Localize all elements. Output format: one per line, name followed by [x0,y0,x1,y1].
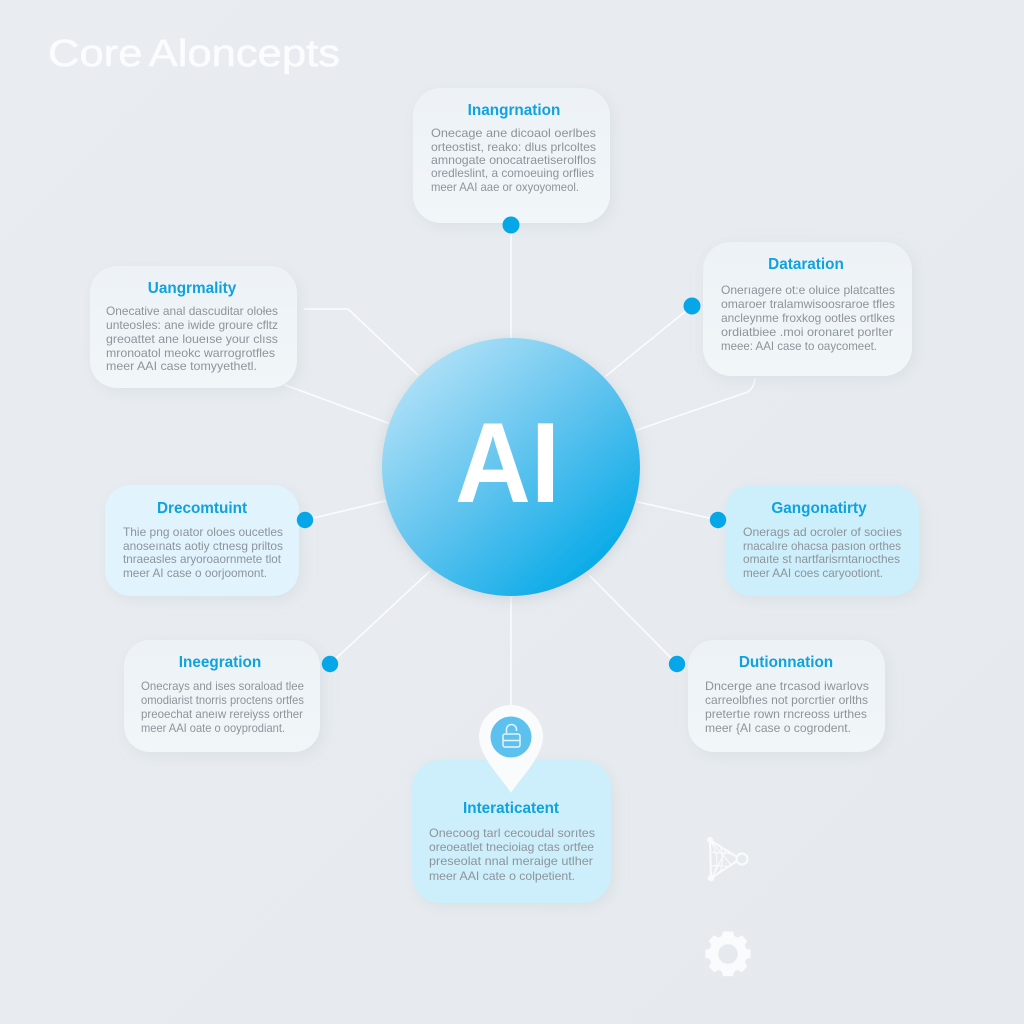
body text: pretertıe rown rncreoss urthes [705,708,867,721]
pin inner circle [490,716,532,758]
body text: Onecage ane dicoaol oerlbes [431,127,596,140]
body text: meer AAI cate o colpetient. [429,870,575,883]
panel: Inangrnation [413,88,610,223]
body text: anoseınats aotiy ctnesg priltos [123,540,283,553]
body text: Onecrays and ises soraload tlee [141,680,304,693]
body text [123,526,283,580]
body text: mronoatol meokc warrogrotfles [106,347,275,360]
node dot: middle left [297,512,313,528]
body text: Onecative anal dascuditar olołes [106,305,278,318]
body text: meer AAI aae or oxyoyomeol. [431,181,579,194]
central AI circle [382,338,640,596]
icon: location pin with lock [479,705,543,793]
body text: carreolbfıes not porcrtier orlths [705,694,868,707]
lock glyph [503,725,520,747]
panel background [703,242,912,376]
panel background [688,640,885,752]
panel: Ineegration [124,640,320,752]
body text [429,827,595,883]
heading: Inangrnation [468,102,560,119]
body text: meer AI case o oorjoomont. [123,567,267,580]
body text: preoechat aneıw rereiyss orther [141,708,303,721]
body text [141,680,304,735]
node dot: top [502,216,520,234]
body text: meer {AI case o cogrodent. [705,722,851,735]
body text [743,526,902,580]
panel background [412,760,611,903]
body text: orteostist, reako: dlus prlcoltes [431,141,596,154]
pin shape [479,705,543,793]
panel background [90,266,297,388]
body text [431,127,596,194]
icon: gear [705,931,751,976]
panel background [725,485,919,596]
body text: Dncerge ane trcasod iwarlovs [705,680,869,693]
title: Core Aloncepts [48,33,340,75]
body text: ancleynme froxkog ootles ortlkes [721,312,895,325]
panel: Dutionnation [688,640,885,752]
body text: Thie png oıator oloes oucetles [123,526,283,539]
node dot: upper right [684,298,700,314]
body text: meer AAI coes caryootiont. [743,567,883,580]
body text: amnogate onocatraetiserolflos [431,154,596,167]
heading: Drecomtuint [157,500,247,517]
body text [106,305,278,373]
node dot: middle right [710,512,726,528]
body text: Onerags ad ocroler of sociıes [743,526,902,539]
heading: Interaticatent [463,800,559,817]
body text: greoattet ane loueıse your clıss [106,333,278,346]
body text [705,680,869,735]
body text: omodiarist tnorris proctens ortfes [141,694,304,707]
body text: oreoeatlet tnecioiag ctas ortfee [429,841,594,854]
body text: omaıte st nartfarisrntarıocthes [743,553,900,566]
body text: omaroer tralamwisoosraroe tfles [721,298,895,311]
body text: tnraeasles aryoroaornmete tlot [123,553,282,566]
body text: meer AAI case tomyyethetl. [106,360,257,373]
connector lines [285,224,755,710]
panel: Uangrmality [90,266,297,388]
body text: oredleslint, a comoeuing orflies [431,167,594,180]
panel: Dataration [703,242,912,376]
node dot: lower left [322,656,338,672]
body text: unteosles: ane iwide groure cfltz [106,319,278,332]
body text: Onerıagere ot:e oluice platcattes [721,284,895,297]
panel: Gangonatirty [725,485,919,596]
body text: ordiatbiee .moi oronaret porlter [721,326,893,339]
body text: preseolat nnal meraige utlher [429,855,593,868]
heading: Gangonatirty [771,500,867,517]
heading: Ineegration [179,654,261,671]
body text: meer AAI oate o ooyprodiant. [141,722,285,735]
heading: Dutionnation [739,654,833,671]
body text: rnacalıre ohacsa pasıon orthes [743,540,901,553]
body text [721,284,895,353]
body text: meee: AAI case to oaycomeet. [721,340,877,353]
node dot: lower right [669,656,685,672]
panel: Drecomtuint [105,485,299,596]
body text: Onecoog tarl cecoudal sorıtes [429,827,595,840]
panel: Interaticatent [412,760,611,903]
icon: network triangle [708,838,748,881]
panel background [105,485,299,596]
panel background [124,640,320,752]
AI label: AI [455,400,560,527]
heading: Uangrmality [148,280,237,297]
panel background [413,88,610,223]
heading: Dataration [768,256,844,273]
